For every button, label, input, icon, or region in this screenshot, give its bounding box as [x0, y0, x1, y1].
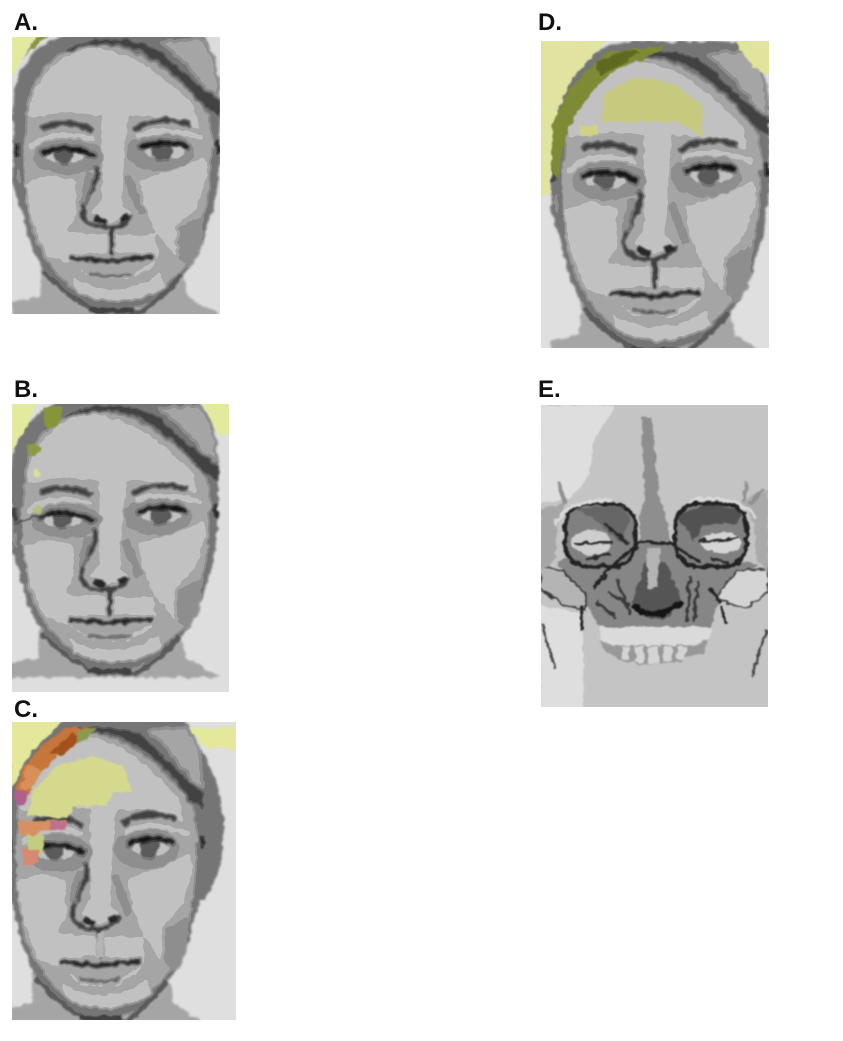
panel D: frontal face with olive highlight	[538, 9, 771, 358]
left orbit	[565, 503, 636, 567]
illustration D	[540, 40, 771, 358]
label C: C.	[14, 696, 38, 723]
label A: A.	[14, 9, 38, 36]
frontal crest	[640, 417, 670, 542]
panel C: frontal face with coloured highlight	[5, 696, 238, 1025]
panel B: frontal face with incision line	[10, 376, 231, 692]
label B: B.	[14, 376, 38, 403]
right orbit	[675, 503, 747, 567]
illustration E: skull	[540, 405, 768, 708]
panel E: facial skeleton	[538, 376, 768, 708]
nasal opening	[632, 562, 682, 620]
illustration C	[5, 717, 238, 1025]
left cheekbone	[540, 565, 587, 610]
illustration B	[10, 397, 231, 692]
teeth	[599, 627, 712, 645]
panel A: frontal face	[10, 9, 222, 317]
illustration A	[10, 30, 222, 317]
right cheekbone	[717, 568, 768, 608]
temporal fragments	[541, 503, 564, 568]
label D: D.	[538, 9, 562, 36]
midface and maxilla	[557, 542, 757, 628]
jaw lines	[542, 625, 767, 677]
label E: E.	[538, 376, 561, 403]
